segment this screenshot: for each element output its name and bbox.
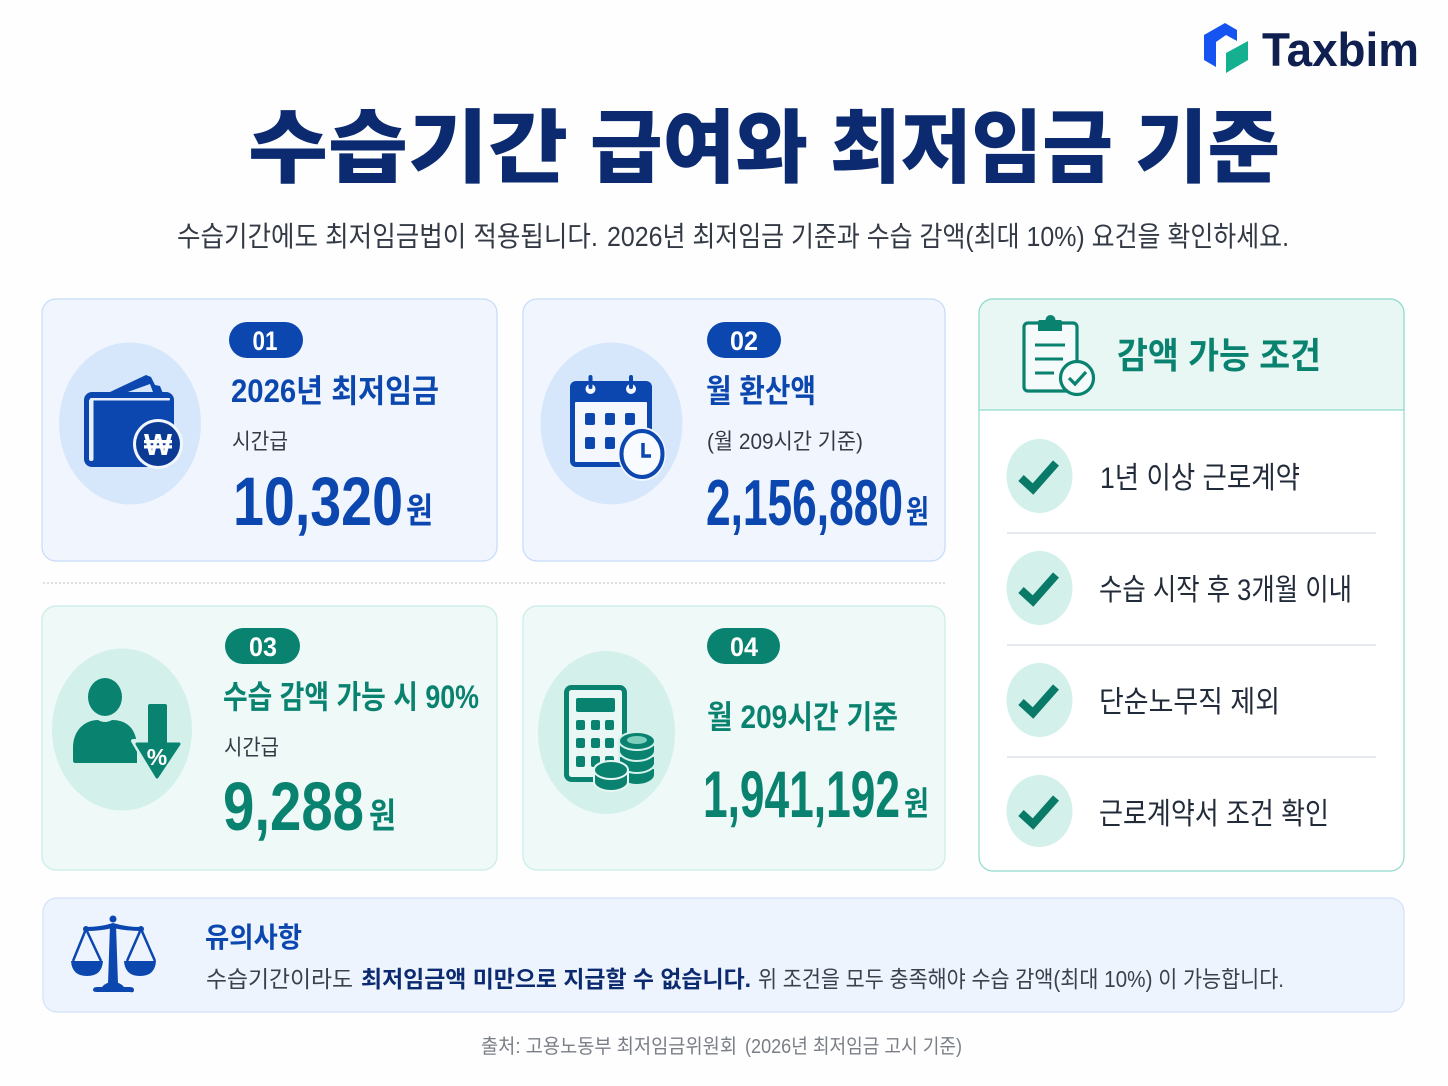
value 01: 원 [406,492,433,531]
title: 급여와 [590,104,808,193]
icon: calculator with coins [566,688,655,791]
subtitle [177,221,1289,252]
badge 02 [707,322,781,358]
icon: clipboard check [1024,315,1094,394]
title: 수습기간 [248,104,568,193]
icon: calendar with clock [570,375,666,481]
panel header [979,299,1404,410]
notice body: 위 조건을 모두 충족해야 수습 감액(최대 10%) 이 가능합니다. [758,966,1284,992]
badge 03: 03 [249,632,277,662]
logo: Taxbim: Taxbim [1262,23,1419,76]
heading 03: 수습 감액 가능 시 90% [223,679,479,715]
condition 4: 근로계약서 조건 확인 [1099,798,1329,831]
source: 출처: 고용노동부 최저임금위원회 [481,1035,737,1058]
condition 2: 수습 시작 후 3개월 이내 [1099,574,1352,607]
panel: card 01 minimum wage [42,299,497,561]
title: 최저임금 [830,104,1113,193]
title: 기준 [1135,104,1280,193]
condition 1 [1006,439,1300,513]
badge 04: 04 [730,632,758,662]
panel: notice [43,898,1404,1012]
condition 3 [1006,663,1280,737]
value 02: 2,156,880 [706,466,903,539]
source: (2026년 최저임금 고시 기준) [745,1035,962,1058]
panel: card 03 reduced wage [42,606,497,870]
icon: scales [71,916,156,992]
icon: person with percent arrow: % [147,744,167,770]
heading 01: 2026년 최저임금 [231,373,439,409]
badge 01: 01 [252,326,278,356]
value 04: 원 [904,785,929,822]
value 04: 1,941,192 [703,757,900,831]
notice body: 수습기간이라도 [206,966,353,992]
value 01: 10,320 [233,463,403,540]
heading 02: 월 환산액 [706,373,816,409]
value 02: 원 [906,494,929,530]
condition 2 [1006,551,1352,625]
label 03: 시간급 [224,735,279,760]
panel heading: 감액 가능 조건 [1117,335,1321,376]
subtitle: 수습기간에도 최저임금법이 적용됩니다. [177,221,598,252]
panel: card 04 reduced monthly [523,606,945,870]
badge 04 [707,628,780,664]
notice body [206,966,1284,992]
condition 1: 1년 이상 근로계약 [1100,462,1300,495]
icon: wallet [84,375,183,469]
notice body: 최저임금액 미만으로 지급할 수 없습니다. [361,966,751,992]
panel: card 02 monthly amount [523,299,945,561]
icon: person with percent arrow [73,678,183,782]
badge 03 [225,628,300,664]
notice heading: 유의사항 [205,922,302,953]
dotted divider [43,582,945,584]
condition 4 [1006,775,1329,847]
subtitle: 2026년 최저임금 기준과 수습 감액(최대 10%) 요건을 확인하세요. [607,221,1289,252]
heading 04: 월 209시간 기준 [707,699,898,735]
source [481,1035,962,1058]
value 03: 원 [369,797,396,836]
badge 02: 02 [730,326,758,356]
panel: reduction conditions [979,299,1404,871]
label 02: (월 209시간 기준) [707,429,863,454]
value 03: 9,288 [223,768,364,845]
condition 3: 단순노무직 제외 [1099,686,1280,719]
icon: wallet: ₩ [144,427,173,462]
title [248,104,1280,193]
badge 01 [229,322,303,358]
label 01: 시간급 [232,429,288,454]
